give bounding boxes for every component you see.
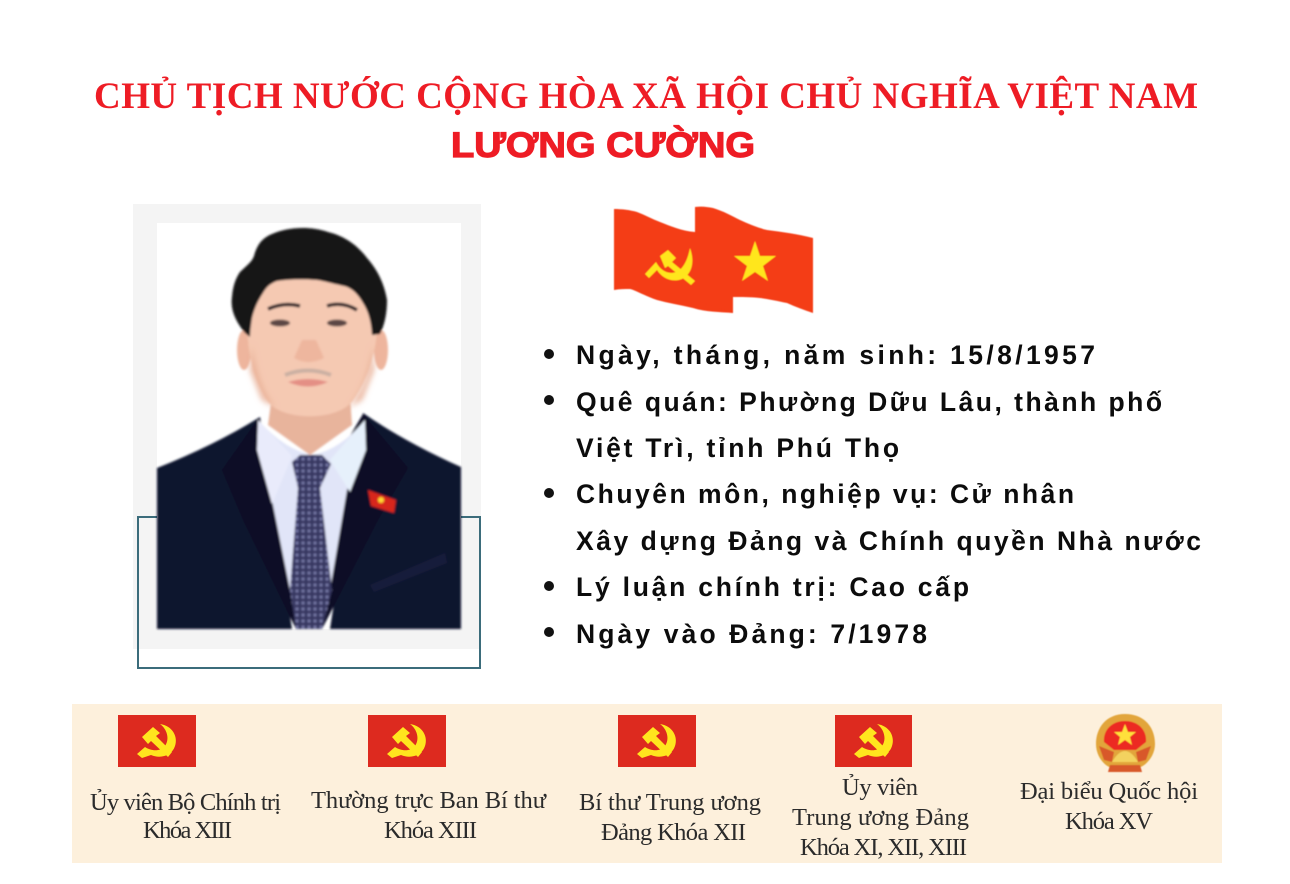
position: Central Committee: [792, 715, 969, 861]
icon: party and national flags: [614, 207, 813, 313]
neck: [268, 395, 352, 455]
text block: biography: [544, 340, 1201, 649]
moustache: [285, 370, 331, 375]
position: Central Secretary: Đảng Khóa XII: [601, 819, 746, 846]
position: National Assembly: Đại biểu Quốc hội: [1020, 778, 1198, 805]
hometown: Quê quán: Phường Dữu Lâu, thành phố: [576, 387, 1162, 417]
position: Secretariat: [311, 715, 547, 844]
party admission: Ngày vào Đảng: 7/1978: [576, 619, 927, 649]
nose: [294, 340, 324, 362]
bullet list markers: [544, 349, 554, 637]
face: [248, 270, 377, 416]
position: Central Committee: Khóa XI, XII, XIII: [800, 834, 967, 861]
jacket: [157, 413, 461, 629]
position: Central Committee: Trung ương Đảng: [792, 804, 969, 831]
panel: portrait: [133, 204, 481, 668]
mouth: [288, 379, 328, 386]
icon: party flag: [835, 715, 912, 767]
heading: name: LƯƠNG CƯỜNG: [451, 125, 755, 165]
expertise: Chuyên môn, nghiệp vụ: Cử nhân: [576, 479, 1074, 509]
panel: positions band: [72, 704, 1222, 863]
hometown line 2: Việt Trì, tỉnh Phú Thọ: [576, 433, 899, 463]
political theory: Lý luận chính trị: Cao cấp: [576, 572, 969, 602]
expertise line 2: Xây dựng Đảng và Chính quyền Nhà nước: [576, 526, 1201, 556]
eyes: [270, 320, 290, 326]
position: Secretariat: Khóa XIII: [384, 817, 477, 844]
position: Central Committee: Ủy viên: [842, 773, 918, 801]
icon: party flag: [618, 715, 696, 767]
cheek contour: [250, 345, 374, 408]
icon: national emblem: [1096, 714, 1155, 772]
shirt: [258, 420, 365, 590]
position: Politburo: Khóa XIII: [143, 817, 232, 844]
position: Politburo: Ủy viên Bộ Chính trị: [90, 788, 281, 816]
title: CHỦ TỊCH NƯỚC CỘNG HÒA XÃ HỘI CHỦ NGHĨA VIỆT NAM: [94, 74, 1198, 117]
icon: party flag: [118, 715, 196, 767]
portrait photo illustration: [157, 228, 461, 629]
hair: [232, 228, 387, 337]
ears: [237, 330, 251, 370]
brows: [268, 305, 300, 309]
position: Politburo: [90, 715, 281, 844]
lapel pin: [368, 490, 396, 513]
icon: party flag: [368, 715, 446, 767]
jacket pocket: [370, 553, 447, 592]
tie: [290, 455, 332, 629]
position: Central Secretary: [579, 715, 761, 846]
position: National Assembly: Khóa XV: [1065, 808, 1153, 835]
position: Central Secretary: Bí thư Trung ương: [579, 789, 761, 816]
position: National Assembly: [1020, 714, 1198, 835]
birth date: Ngày, tháng, năm sinh: 15/8/1957: [576, 340, 1095, 370]
position: Secretariat: Thường trực Ban Bí thư: [311, 787, 547, 814]
